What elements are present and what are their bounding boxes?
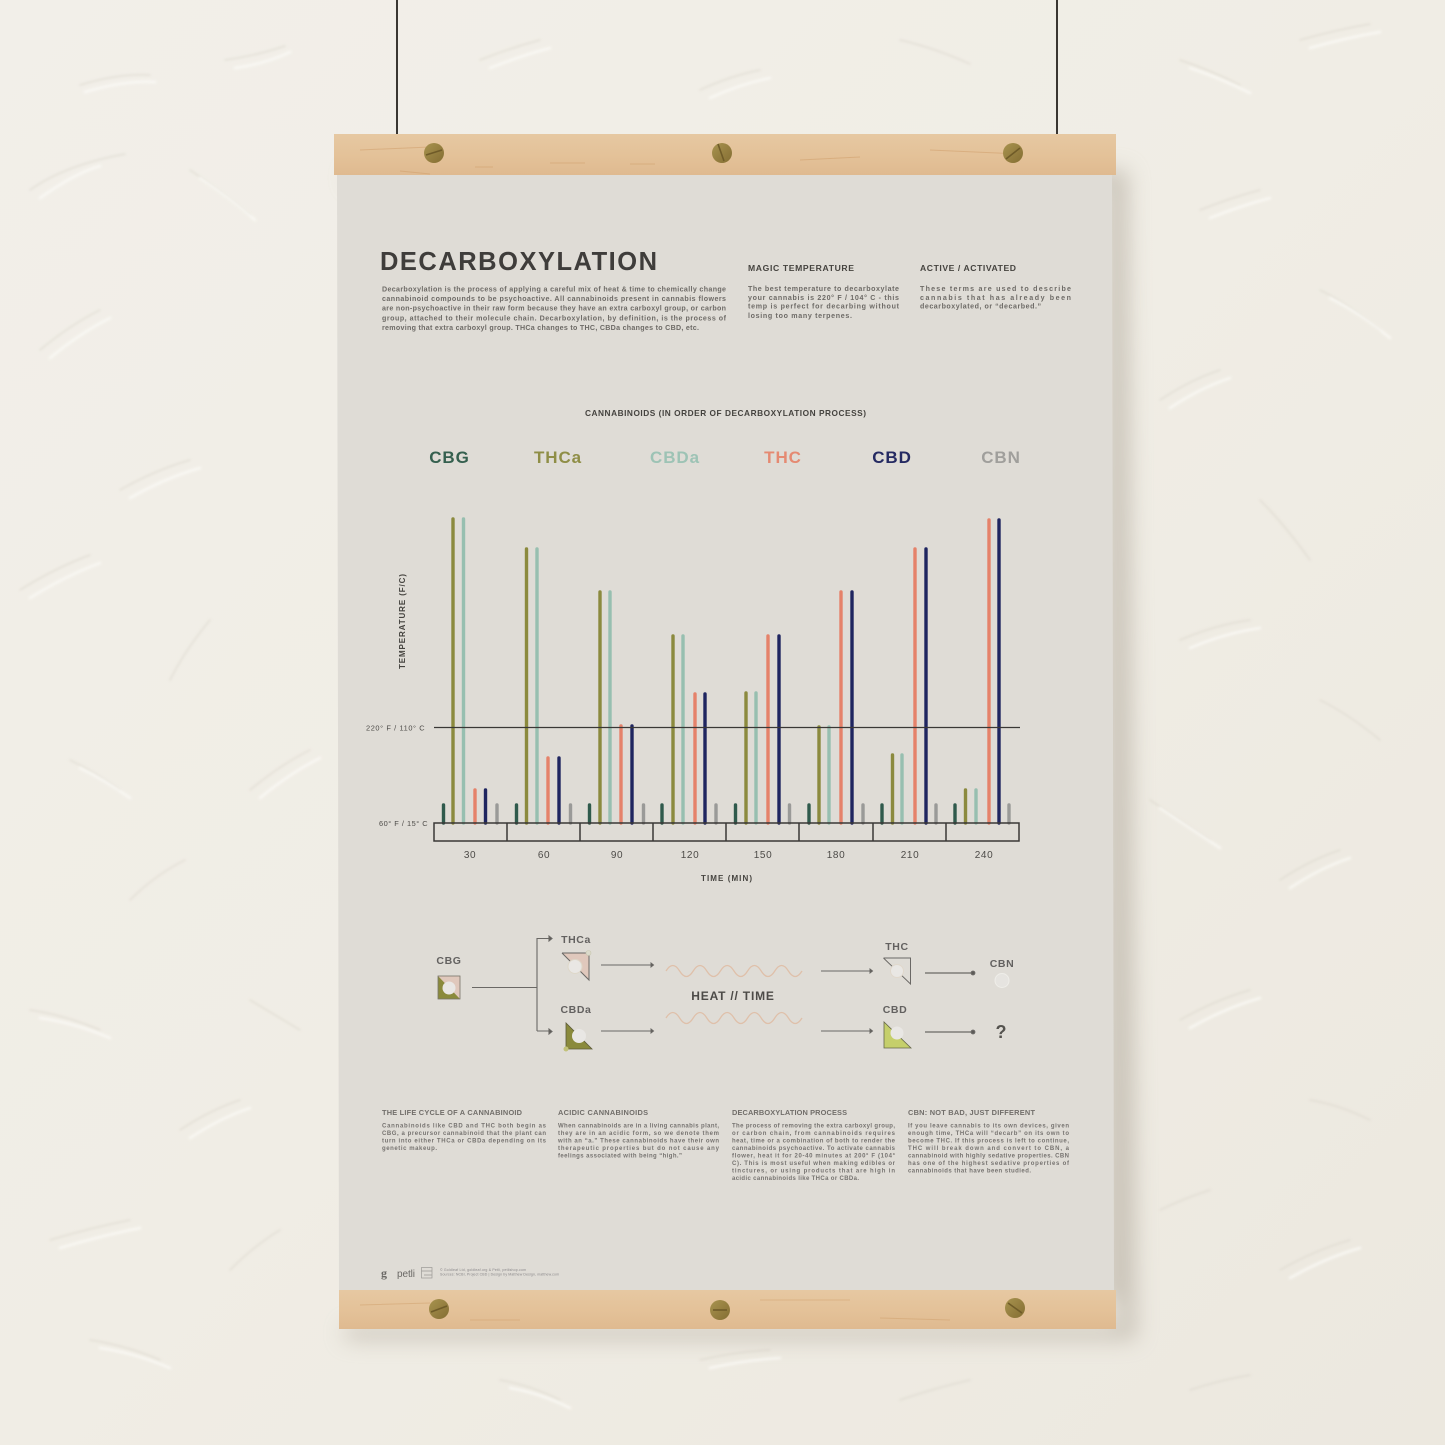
lines to end states <box>925 971 975 1034</box>
unknown end state: ? <box>996 1022 1006 1042</box>
time axis boxes <box>434 823 1019 841</box>
text column: acidic cannabinoids: they are in an acidic form, so we denote them <box>558 1131 719 1137</box>
legend: cannabinoid names: CBG <box>429 448 470 467</box>
magic temperature block: temp is perfect for decarbing without <box>748 303 900 311</box>
text column: decarboxylation process: acidic cannabinoids like THCa or CBDa. <box>732 1176 859 1182</box>
credits: Sources: NCBI, Project CBD | Design by Matthew Design, matthew.com <box>440 1272 559 1276</box>
intro text block: Decarboxylation is the process of applying a careful mix of heat & time to chemically change <box>382 286 726 294</box>
text column: acidic cannabinoids: therapeutic properties but do not cause any <box>558 1146 720 1152</box>
node: CBN: CBN <box>990 958 1014 970</box>
text column: CBN: has one of the highest sedative properties of <box>908 1161 1070 1167</box>
node: CBG: CBG <box>436 955 462 967</box>
logo: g: g <box>381 1266 387 1280</box>
bar chart <box>366 519 1020 883</box>
text column: CBN: cannabinoid with highly sedative properties. CBN <box>908 1154 1069 1160</box>
bars: CBD <box>486 520 999 823</box>
node: CBD <box>883 1004 911 1048</box>
text column: decarboxylation process: tinctures, or using products that are high in <box>732 1168 895 1174</box>
legend heading: CANNABINOIDS (IN ORDER OF DECARBOXYLATION PROCESS) <box>585 408 866 418</box>
node: CBDa <box>560 1004 592 1052</box>
credits <box>440 1268 559 1276</box>
text column: life cycle: CBG, a precursor cannabinoid that the plant can <box>382 1131 546 1137</box>
text column: life cycle: turn into either THCa or CBDa depending on its <box>382 1138 547 1144</box>
legend: cannabinoid names: CBDa <box>650 448 700 467</box>
y axis title: TEMPERATURE (F/C) <box>398 574 407 669</box>
active / activated block: These terms are used to describe <box>920 285 1071 293</box>
text column: CBN: If you leave cannabis to its own devices, given <box>908 1124 1069 1130</box>
text column: acidic cannabinoids: When cannabinoids are in a living cannabis plant, <box>558 1124 719 1130</box>
node: CBD: CBD <box>883 1004 907 1016</box>
magic temperature block: your cannabis is 220° F / 104° C - this <box>748 294 899 302</box>
text column: decarboxylation process: or carbon chain, from cannabinoids requires <box>732 1131 896 1137</box>
bars: CBDa <box>464 519 976 823</box>
text column: life cycle <box>382 1108 547 1152</box>
intro text block: group, attached to their molecule chain. Decarboxylation, by definition, is the process of <box>382 314 727 322</box>
text column: life cycle: genetic makeup. <box>382 1146 437 1152</box>
hanging wires <box>397 0 1057 134</box>
label 220: 220° F / 110° C <box>366 724 425 732</box>
text column: CBN: enough time, THCa will “decarb” on its own to <box>908 1131 1069 1137</box>
node: CBG <box>436 955 462 999</box>
top wooden rail <box>334 134 1116 175</box>
title: DECARBOXYLATION <box>380 248 657 276</box>
text column: CBN: THC will break down and convert to CBN, a <box>908 1146 1070 1152</box>
time labels: 30 <box>464 850 476 861</box>
credits: © Goldleaf Ltd, goldleaf.org & Petli, petlishop.com <box>440 1268 526 1272</box>
label 60: 60° F / 15° C <box>379 819 428 828</box>
magic temperature block <box>748 263 900 320</box>
time labels: 210 <box>901 850 919 861</box>
text column: acidic cannabinoids: with an “a.” These cannabinoids have their own <box>557 1138 719 1144</box>
footer logos and credits <box>381 1266 559 1280</box>
node: CBDa: CBDa <box>560 1004 592 1016</box>
bars: CBG <box>444 805 955 823</box>
logo: box <box>422 1268 432 1278</box>
legend: cannabinoid names: THCa <box>534 448 582 467</box>
poster sheet <box>337 170 1114 1295</box>
flow diagram <box>436 934 1014 1052</box>
node: THCa: THCa <box>561 934 591 946</box>
active / activated block: decarboxylated, or “decarbed.” <box>920 303 1041 311</box>
bottom wooden rail <box>339 1290 1116 1329</box>
magic temperature block: The best temperature to decarboxylate <box>748 285 899 293</box>
active / activated block <box>920 263 1071 311</box>
poster shadow <box>345 170 1136 1340</box>
legend: cannabinoid names: CBN <box>981 448 1021 467</box>
text column: CBN <box>908 1108 1070 1174</box>
heat // time label: HEAT // TIME <box>691 989 775 1003</box>
intro text block: are non-psychoactive in their raw form because they have an extra carboxyl group, or carbon <box>382 304 726 312</box>
time labels: 180 <box>827 850 845 861</box>
text column: decarboxylation process <box>732 1108 896 1182</box>
time labels: 150 <box>754 850 772 861</box>
arrows from heat <box>821 969 872 1033</box>
text column: life cycle: Cannabinoids like CBD and THC both begin as <box>382 1124 547 1130</box>
magic temperature block: MAGIC TEMPERATURE <box>748 263 854 273</box>
magic temperature block: losing too many terpenes. <box>748 312 852 320</box>
text column: CBN: CBN: NOT BAD, JUST DIFFERENT <box>908 1108 1035 1117</box>
time labels: 90 <box>611 850 623 861</box>
bars: THCa <box>453 519 966 823</box>
text column: decarboxylation process: flower, heat it for 20-40 minutes at 200° F (104° <box>732 1154 896 1160</box>
bars: THC <box>475 520 989 823</box>
text column: decarboxylation process: heat, time or a combination of both to render the <box>732 1138 896 1144</box>
active / activated block: ACTIVE / ACTIVATED <box>920 263 1016 273</box>
text column: life cycle: THE LIFE CYCLE OF A CANNABINOID <box>382 1108 523 1117</box>
legend: cannabinoid names <box>429 448 1021 467</box>
text column: decarboxylation process: The process of removing the extra carboxyl group, <box>732 1124 895 1130</box>
heat wave top <box>666 966 802 976</box>
screw <box>424 143 444 163</box>
x axis title: TIME (MIN) <box>701 874 752 883</box>
node: CBN <box>990 958 1014 988</box>
time labels: 60 <box>538 850 550 861</box>
text column: acidic cannabinoids <box>557 1108 720 1160</box>
text column: acidic cannabinoids: ACIDIC CANNABINOIDS <box>558 1108 648 1117</box>
220 degree reference line <box>434 726 1020 728</box>
node: THC <box>884 941 910 984</box>
screw <box>1005 1298 1025 1318</box>
screw <box>429 1299 449 1319</box>
node: THC: THC <box>885 941 909 953</box>
text column: CBN: cannabinoids that have been studied. <box>908 1168 1031 1174</box>
time labels: 240 <box>975 850 993 861</box>
intro text block: removing that extra carboxyl group. THCa changes to THC, CBDa changes to CBD, etc. <box>382 324 699 332</box>
text column: acidic cannabinoids: feelings associated with being “high.” <box>558 1154 682 1160</box>
bars: CBN <box>497 805 1009 823</box>
screw <box>710 1300 730 1320</box>
text column: decarboxylation process: C). This is most useful when making edibles or <box>732 1161 896 1167</box>
active / activated block: cannabis that has already been <box>920 294 1071 302</box>
intro text block <box>382 286 727 332</box>
time labels: 120 <box>681 850 699 861</box>
heat wave bottom <box>666 1012 802 1024</box>
text column: decarboxylation process: cannabinoids psychoactive. To activate cannabis <box>732 1146 896 1152</box>
node: THCa <box>561 934 591 980</box>
legend: cannabinoid names: CBD <box>872 448 912 467</box>
time labels <box>464 850 993 861</box>
legend: cannabinoid names: THC <box>764 448 802 467</box>
screw <box>712 143 732 163</box>
text column: decarboxylation process: DECARBOXYLATION PROCESS <box>732 1108 847 1117</box>
screw <box>1003 143 1023 163</box>
arrows to heat <box>601 963 654 1033</box>
branch arrows from CBG <box>472 936 552 1034</box>
logo: petli: petli <box>397 1269 415 1280</box>
text column: CBN: become THC. If this process is left to continue, <box>908 1138 1069 1144</box>
intro text block: cannabinoid compounds to be psychoactive. All cannabinoids present in cannabis flowers <box>382 295 726 303</box>
